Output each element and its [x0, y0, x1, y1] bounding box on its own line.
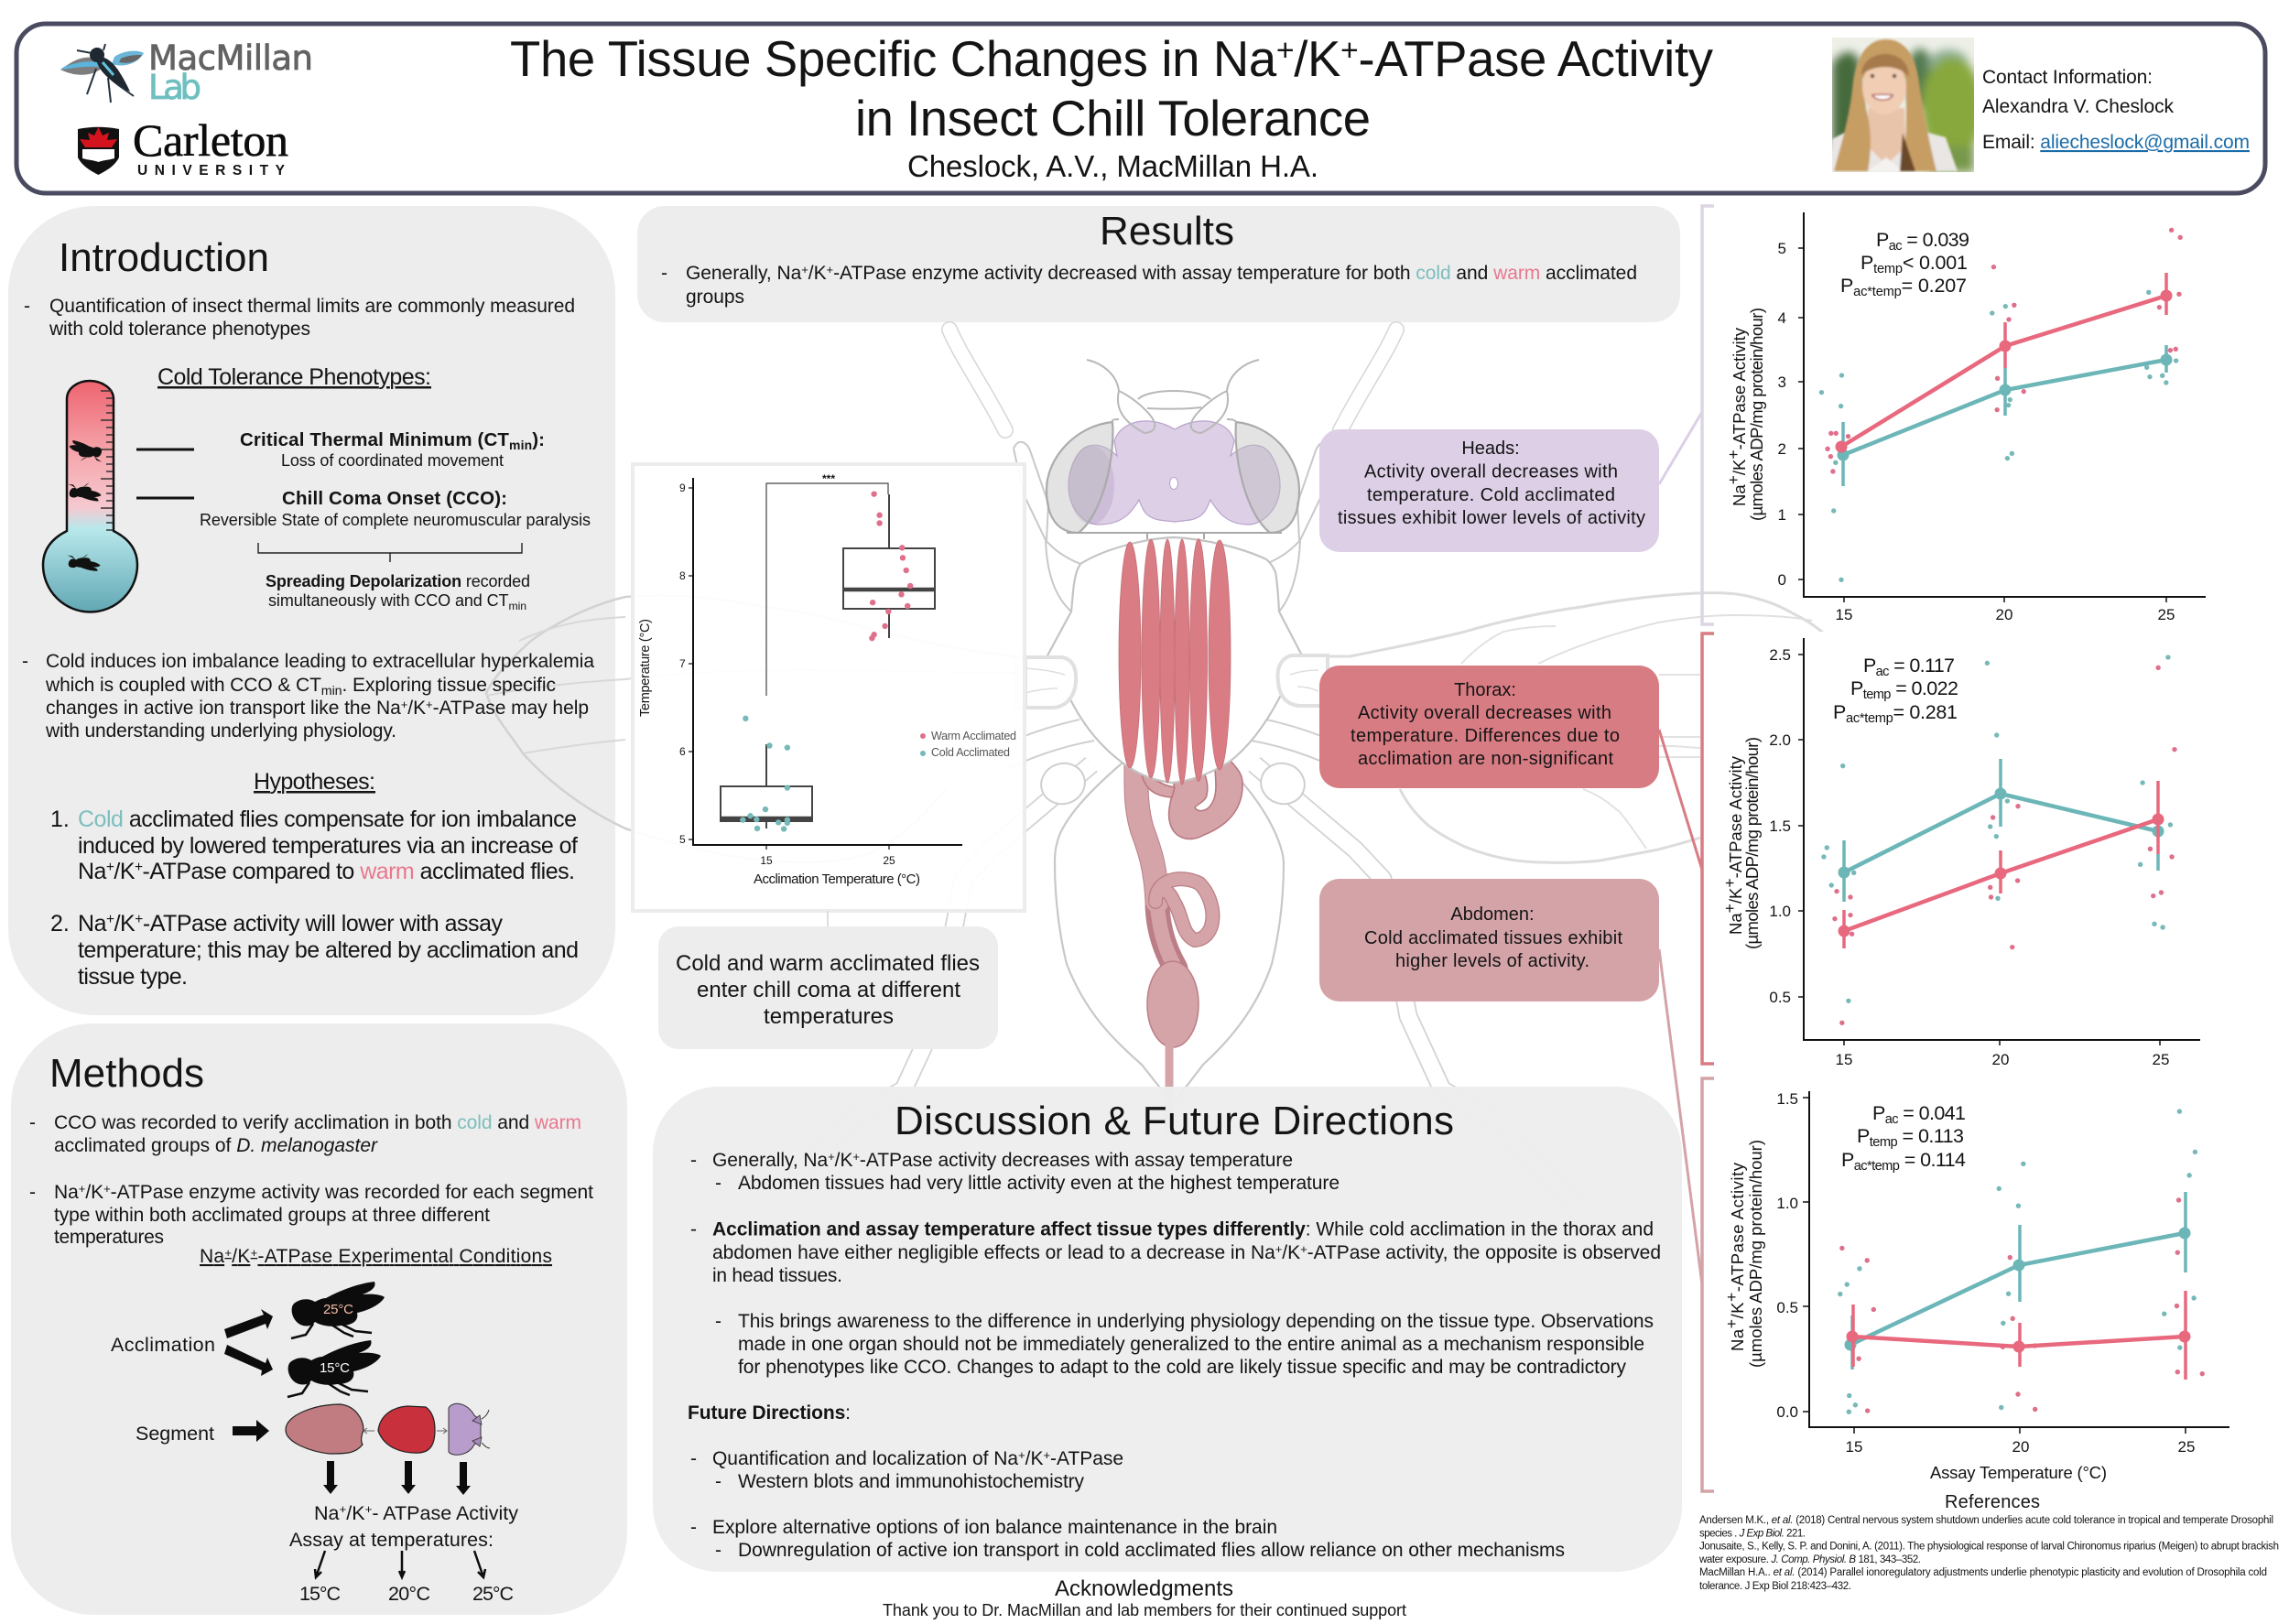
discussion point 1: Generally, Na+/K+-ATPase activity decreases with assay temperature — [712, 1150, 1293, 1171]
x axis title: Acclimation Temperature (°C) — [754, 872, 920, 887]
chart bracket: heads — [1702, 206, 1714, 624]
y tick labels: 2.5 — [1769, 646, 1791, 664]
raw points warm — [1839, 1197, 2205, 1413]
thermometer fly 2 — [68, 481, 102, 504]
chart: heads activity — [1724, 212, 2206, 623]
acknowledgments — [883, 1576, 1406, 1619]
hypotheses heading: Hypotheses: — [254, 769, 375, 795]
CCO description: Chill Coma Onset (CCO): — [282, 488, 507, 509]
MacMillan Lab logo — [60, 38, 313, 107]
chart bracket: abdomen — [1702, 1078, 1714, 1491]
axes — [1804, 638, 2200, 1040]
y tick labels: 1.0 — [1769, 903, 1791, 920]
y axis title: Na+/K+-ATPase Activity — [1722, 1162, 1747, 1351]
connector: abdomen to chart — [1659, 949, 1702, 1284]
wordmark Carleton: Carleton — [133, 114, 288, 166]
p values — [1833, 655, 1958, 726]
intro bullet 2 — [22, 651, 594, 742]
reference list: species . J Exp Biol. 221. — [1699, 1529, 1806, 1540]
header banner — [16, 24, 2265, 193]
x tick labels: 25 — [2178, 1438, 2195, 1456]
results summary — [661, 262, 1637, 308]
hypothesis 2: Na+/K+-ATPase activity will lower with assay — [78, 911, 504, 937]
thorax flight muscles — [1119, 538, 1231, 785]
reference list: MacMillan H.A.. et al. (2014) Parallel ionoregulatory adjustments underlie phenotypic plasticity and evolution of Drosophila cold — [1699, 1567, 2267, 1578]
y axis title: (µmoles ADP/mg protein/hour) — [1742, 737, 1762, 949]
discussion point 3: made in one organ should not be immediately generalized to the entire animal as a mechanism responsible — [738, 1334, 1644, 1355]
results summary: groups — [686, 287, 744, 308]
p values — [1840, 229, 1969, 299]
warm acclimated series — [1839, 781, 2164, 948]
x tick labels: 20 — [1992, 1051, 2009, 1068]
boxplot y tick labels: 9 — [679, 482, 686, 494]
panel: methods background — [11, 1023, 627, 1615]
intro bullet 1: with cold tolerance phenotypes — [49, 319, 310, 340]
callout: abdomen — [1319, 879, 1659, 1001]
title line 1: The Tissue Specific Changes in Na+/K+-ATPase Activity — [510, 31, 1714, 87]
chill coma boxplot — [633, 464, 1025, 926]
reference list: Andersen M.K., et al. (2018) Central nervous system shutdown underlies acute cold tolerance in tropical and temperate Drosophil — [1699, 1515, 2273, 1526]
connector: thorax to chart — [1659, 730, 1702, 870]
discussion point 3 — [715, 1311, 1654, 1378]
hypothesis 2: temperature; this may be altered by acclimation and — [78, 937, 579, 963]
results heading: Results — [1100, 209, 1234, 254]
y tick labels: 0.0 — [1776, 1403, 1798, 1421]
y axis title — [1722, 1140, 1765, 1368]
warm acclimated series — [1846, 1291, 2190, 1380]
methods bullet 1: - — [29, 1112, 36, 1133]
y axis title — [1720, 737, 1762, 949]
references — [1698, 1492, 2279, 1592]
boxplot legend — [920, 730, 1016, 759]
CTmin description — [240, 429, 545, 470]
future direction 2: Explore alternative options of ion balance maintenance in the brain — [712, 1517, 1277, 1538]
connector: heads to chart — [1659, 412, 1702, 484]
methods bullet 2 — [29, 1181, 593, 1248]
callout: cold and warm flies: temperatures — [764, 1004, 894, 1029]
hypothesis 1: Cold acclimated flies compensate for ion imbalance — [78, 807, 577, 832]
p values: Pac = 0.117 — [1863, 655, 1955, 679]
assay temperatures: 25°C — [472, 1583, 514, 1605]
ticks — [1803, 1098, 2186, 1434]
x tick labels: 15 — [1836, 606, 1852, 623]
boxplot y tick labels: 8 — [679, 569, 686, 582]
callout: abdomen: Cold acclimated tissues exhibit — [1364, 928, 1622, 948]
chart: thorax activity — [1720, 638, 2200, 1068]
contact name: Alexandra V. Cheslock — [1982, 96, 2174, 117]
y tick labels: 0 — [1778, 571, 1786, 589]
segment arrow — [233, 1420, 269, 1442]
segment head — [449, 1403, 490, 1455]
x tick labels — [1836, 1051, 2169, 1068]
ticks — [1798, 655, 2160, 1045]
wordmark University: UNIVERSITY — [137, 163, 286, 179]
CTmin description: Loss of coordinated movement — [281, 451, 504, 470]
thermometer icon — [43, 381, 137, 612]
methods heading: Methods — [49, 1051, 204, 1096]
callout: thorax: Thorax: — [1454, 680, 1516, 700]
y tick labels: 2.0 — [1769, 731, 1791, 749]
chart: abdomen activity — [1722, 1090, 2229, 1482]
cold acclimated series — [1844, 1192, 2190, 1370]
hypothesis 1: 1. — [50, 807, 70, 832]
p values: Pac*temp= 0.207 — [1840, 275, 1967, 299]
callout: heads: tissues exhibit lower levels of activity — [1338, 508, 1645, 528]
portrait photo — [1832, 38, 1983, 172]
discussion point 2 — [690, 1219, 1661, 1286]
y axis title: Na+/K+-ATPase Activity — [1720, 755, 1745, 935]
chart bracket: thorax — [1702, 633, 1714, 1064]
intro bullet 1 — [24, 296, 575, 340]
introduction heading: Introduction — [59, 235, 269, 280]
box warm acclimated — [843, 494, 935, 638]
hypothesis 1: Na+/K+-ATPase compared to warm acclimated flies. — [78, 859, 575, 884]
y axis title: (µmoles ADP/mg protein/hour) — [1746, 1140, 1765, 1368]
hind legs — [771, 720, 1575, 1205]
axes — [1809, 1091, 2229, 1427]
methods bullet 2: type within both acclimated groups at three different — [54, 1205, 490, 1226]
panel: results background — [637, 206, 1680, 322]
wing roots — [1016, 655, 1328, 708]
Carleton University logo — [78, 114, 288, 179]
discussion point 1: - — [690, 1150, 697, 1171]
discussion heading: Discussion & Future Directions — [895, 1099, 1454, 1143]
raw points warm — [1825, 228, 2183, 474]
optic lobe shading left — [1069, 446, 1114, 525]
results summary: Generally, Na+/K+-ATPase enzyme activity decreased with assay temperature for both cold and warm acclimated — [686, 262, 1637, 284]
x tick labels: 20 — [1996, 606, 2012, 623]
boxplot frame — [633, 464, 1025, 911]
wing root veins — [1025, 668, 1318, 693]
boxplot x tick labels: 15 — [760, 854, 773, 867]
panel: introduction background — [8, 206, 615, 1015]
y axis title — [1724, 308, 1766, 521]
logo wordmark Lab: Lab — [148, 68, 201, 107]
temperature arrows — [315, 1551, 485, 1577]
discussion point 2: in head tissues. — [712, 1265, 842, 1286]
y tick labels: 2 — [1778, 440, 1786, 458]
discussion point 3: for phenotypes like CCO. Changes to adapt to the cold are likely tissue specific and may be contradictory — [738, 1357, 1626, 1378]
level markers — [136, 449, 194, 498]
future direction 1: - — [690, 1448, 697, 1469]
y tick labels — [1778, 240, 1786, 589]
y tick labels: 5 — [1778, 240, 1786, 257]
callout: abdomen: Abdomen: — [1450, 904, 1535, 925]
shield icon — [78, 127, 119, 175]
spreading depolarization note — [266, 572, 530, 612]
raw points cold — [1821, 655, 2173, 1003]
future direction 1: - — [715, 1471, 721, 1492]
CCO description: Reversible State of complete neuromuscular paralysis — [200, 511, 591, 529]
ticks — [1798, 248, 2166, 602]
results summary: - — [661, 263, 667, 284]
intro bullet 2: with understanding underlying physiology. — [45, 720, 396, 742]
axes — [1804, 212, 2206, 597]
methods bullet 1: CCO was recorded to verify acclimation in both cold and warm — [54, 1112, 581, 1133]
callout: thorax: Activity overall decreases with — [1358, 703, 1611, 723]
future direction 1: Quantification and localization of Na+/K+-ATPase — [712, 1448, 1123, 1469]
introduction content — [22, 235, 594, 990]
hypothesis 2 — [50, 911, 579, 990]
head top and antennae — [1087, 360, 1259, 433]
reference list: tolerance. J Exp Biol 218:423–432. — [1699, 1581, 1851, 1592]
future direction 2: - — [690, 1517, 697, 1538]
hindgut and midgut — [1136, 760, 1242, 1131]
discussion point 1 — [690, 1150, 1340, 1194]
boxplot y tick labels: 6 — [679, 745, 686, 758]
raw points cold — [1819, 290, 2178, 582]
acknowledgments: Thank you to Dr. MacMillan and lab members for their continued support — [883, 1601, 1406, 1619]
p values: Ptemp = 0.113 — [1857, 1125, 1964, 1150]
callout: cold and warm flies: Cold and warm acclimated flies — [676, 951, 980, 976]
callout: abdomen: higher levels of activity. — [1395, 951, 1589, 971]
future direction 2 — [690, 1517, 1565, 1561]
segment label: Segment — [136, 1423, 214, 1445]
y tick labels: 4 — [1778, 309, 1786, 327]
intro bullet 2: - — [22, 651, 28, 672]
y axis title: Na+/K+-ATPase Activity — [1724, 327, 1749, 506]
hypothesis 1 — [50, 807, 578, 884]
p values: Pac = 0.039 — [1876, 229, 1969, 254]
callout: heads: temperature. Cold acclimated — [1367, 485, 1615, 505]
assay label: Assay at temperatures: — [289, 1529, 494, 1551]
fly silhouette 25C — [291, 1282, 385, 1338]
methods bullet 2: Na+/K+-ATPase enzyme activity was recorded for each segment — [54, 1181, 593, 1203]
x tick labels: 15 — [1846, 1438, 1862, 1456]
assay temperatures: 20°C — [388, 1583, 430, 1605]
contact email: Email: aliecheslock@gmail.com — [1982, 132, 2250, 153]
raw points cold — [1838, 1109, 2197, 1414]
contact information — [1982, 67, 2250, 153]
logo fly icon — [60, 44, 144, 103]
discussion point 2: abdomen have either negligible effects or lead to a decrease in Na+/K+-ATPase activity, the opposite is observed — [712, 1241, 1661, 1263]
box cold acclimated — [721, 744, 812, 828]
cold tolerance heading: Cold Tolerance Phenotypes: — [157, 364, 431, 390]
y tick labels: 0.5 — [1776, 1299, 1798, 1316]
x tick labels: 20 — [2012, 1438, 2029, 1456]
coxa lobes — [1036, 758, 1310, 809]
discussion point 2: Acclimation and assay temperature affect tissue types differently: While cold acclimation in the thorax and — [712, 1219, 1654, 1240]
right wing — [1299, 593, 1824, 862]
down arrows to assay — [323, 1461, 471, 1495]
boxplot y tick labels — [679, 482, 686, 846]
segment thorax — [378, 1406, 435, 1453]
bracket — [258, 543, 522, 562]
callout: cold and warm flies — [658, 926, 998, 1049]
brain centre — [1170, 478, 1177, 489]
y axis title: (µmoles ADP/mg protein/hour) — [1747, 308, 1766, 521]
intro bullet 1: - — [24, 296, 30, 317]
boxplot legend: Warm Acclimated — [931, 730, 1016, 742]
p values: Pac*temp= 0.281 — [1833, 701, 1958, 726]
x tick labels: 25 — [2153, 1051, 2169, 1068]
thorax outline — [1047, 537, 1302, 783]
methods bullet 1: acclimated groups of D. melanogaster — [54, 1135, 378, 1156]
front leg left — [949, 330, 1080, 612]
discussion point 2: - — [690, 1219, 697, 1240]
title line 2: in Insect Chill Tolerance — [855, 91, 1371, 146]
acclimation arrows — [224, 1309, 273, 1376]
thermometer fly 3 — [67, 552, 101, 574]
fly silhouette 15C — [287, 1340, 381, 1397]
spreading depolarization note: Spreading Depolarization recorded — [266, 572, 530, 590]
panel: discussion background — [653, 1087, 1682, 1572]
hypothesis 1: induced by lowered temperatures via an increase of — [78, 833, 578, 859]
segment small arrows — [363, 1428, 447, 1434]
reference list: Jonusaite, S., Kelly, S. P. and Donini, A. (2011). The physiological response of larval Chironomus riparius (Meigen) to abrupt brackish — [1699, 1542, 2279, 1553]
references heading: References — [1945, 1492, 2040, 1512]
thermometer fly 1 — [70, 440, 102, 462]
authors: Cheslock, A.V., MacMillan H.A. — [907, 149, 1318, 183]
left wing — [486, 595, 1025, 862]
CCO description — [200, 488, 591, 529]
boxplot axes — [693, 478, 962, 845]
acclimation label: Acclimation — [111, 1334, 215, 1356]
future direction 2: - — [715, 1540, 721, 1561]
y tick labels: 1 — [1778, 506, 1786, 524]
callout: thorax — [1319, 666, 1659, 788]
methods bullet 2: temperatures — [54, 1227, 164, 1248]
cold data points — [740, 716, 790, 832]
segment abdomen — [286, 1404, 363, 1454]
hypothesis 2: tissue type. — [78, 964, 188, 990]
x tick labels — [1836, 606, 2175, 623]
y tick labels — [1776, 1090, 1798, 1421]
y axis title: Temperature (°C) — [638, 619, 653, 717]
acknowledgments: Acknowledgments — [1055, 1576, 1233, 1601]
x axis title: Assay Temperature (°C) — [1930, 1463, 2107, 1482]
eye capsule right — [1236, 422, 1299, 533]
connector line — [827, 911, 829, 926]
warm acclimated series — [1835, 273, 2172, 452]
callout: thorax: acclimation are non-significant — [1358, 749, 1613, 769]
re-draw wing root interior over thorax edge — [1025, 655, 1328, 708]
p values: Ptemp< 0.001 — [1860, 252, 1968, 276]
reference list: water exposure. J. Comp. Physiol. B 181, 343–352. — [1698, 1554, 1921, 1565]
p values: Pac*temp = 0.114 — [1841, 1149, 1966, 1174]
spreading depolarization note: simultaneously with CCO and CTmin — [268, 591, 526, 612]
logo wordmark MacMillan: MacMillan — [148, 38, 313, 78]
poster title — [510, 31, 1714, 183]
p values — [1841, 1102, 1966, 1174]
eye capsule left — [1047, 422, 1112, 533]
methods bullet 2: - — [29, 1182, 36, 1203]
results content — [661, 209, 1637, 308]
callout: heads — [1319, 429, 1659, 552]
CTmin description: Critical Thermal Minimum (CTmin): — [240, 429, 545, 452]
warm data points — [869, 491, 913, 641]
boxplot ticks — [689, 488, 889, 850]
label 15C: 15°C — [320, 1360, 350, 1376]
boxplot x tick labels — [760, 854, 895, 867]
discussion point 1: Abdomen tissues had very little activity even at the highest temperature — [738, 1173, 1340, 1194]
p values: Ptemp = 0.022 — [1850, 677, 1958, 702]
methods content — [29, 1051, 593, 1605]
x tick labels: 25 — [2158, 606, 2175, 623]
callout: thorax: temperature. Differences due to — [1351, 726, 1620, 746]
cold acclimated series — [1837, 345, 2172, 486]
y tick labels: 3 — [1778, 374, 1786, 391]
discussion point 1: - — [715, 1173, 721, 1194]
callout: heads: Heads: — [1461, 438, 1520, 459]
raw points warm — [1832, 666, 2177, 1025]
x tick labels: 15 — [1836, 1051, 1852, 1068]
discussion point 3: - — [715, 1311, 721, 1332]
y tick labels: 1.0 — [1776, 1195, 1798, 1212]
discussion point 3: This brings awareness to the difference in underlying physiology depending on the tissue type. Observations — [738, 1311, 1654, 1332]
boxplot legend: Cold Acclimated — [931, 746, 1010, 759]
x tick labels — [1846, 1438, 2195, 1456]
hypothesis 2: 2. — [50, 911, 70, 937]
illustration: fly anatomy — [486, 330, 1824, 1205]
future direction 1: Western blots and immunohistochemistry — [738, 1471, 1084, 1492]
intro bullet 2: Cold induces ion imbalance leading to extracellular hyperkalemia — [46, 651, 594, 672]
future direction 2: Downregulation of active ion transport in cold acclimated flies allow reliance on other mechanisms — [738, 1540, 1565, 1561]
callout: cold and warm flies: enter chill coma at different — [697, 978, 960, 1002]
intro bullet 1: Quantification of insect thermal limits are commonly measured — [49, 296, 575, 317]
cold acclimated series — [1839, 759, 2164, 902]
assay temperatures: 15°C — [299, 1583, 341, 1605]
future directions heading: Future Directions: — [688, 1402, 851, 1424]
y tick labels: 0.5 — [1769, 989, 1791, 1006]
y tick labels: 1.5 — [1776, 1090, 1798, 1108]
experimental conditions heading: Na+/K+-ATPase Experimental Conditions — [200, 1245, 552, 1267]
methods bullet 1 — [29, 1112, 581, 1156]
label 25C: 25°C — [323, 1302, 353, 1317]
brain — [1069, 421, 1280, 525]
reference list — [1698, 1515, 2279, 1592]
head base line — [1067, 533, 1282, 539]
white backing: thorax chart — [1704, 632, 2281, 1069]
future direction 1 — [690, 1448, 1123, 1492]
intro bullet 2: changes in active ion transport like the Na+/K+-ATPase may help — [46, 698, 589, 719]
intro bullet 2: which is coupled with CCO & CTmin. Exploring tissue specific — [45, 675, 556, 698]
header frame — [16, 24, 2265, 193]
y tick labels — [1769, 646, 1791, 1006]
callout: heads: Activity overall decreases with — [1364, 461, 1618, 482]
significance bracket — [766, 472, 888, 696]
abdomen outline — [1055, 763, 1284, 1104]
y tick labels: 1.5 — [1769, 817, 1791, 835]
contact heading: Contact Information: — [1982, 67, 2153, 88]
boxplot y tick labels: 5 — [679, 833, 686, 846]
boxplot x tick labels: 25 — [883, 854, 895, 867]
activity label: Na+/K+- ATPase Activity — [314, 1502, 518, 1524]
significance bracket: *** — [822, 472, 835, 485]
boxplot y tick labels: 7 — [679, 657, 686, 670]
front leg right — [1266, 330, 1396, 612]
p values: Pac = 0.041 — [1872, 1102, 1966, 1127]
assay temperatures — [299, 1583, 514, 1605]
discussion content — [688, 1099, 1661, 1561]
